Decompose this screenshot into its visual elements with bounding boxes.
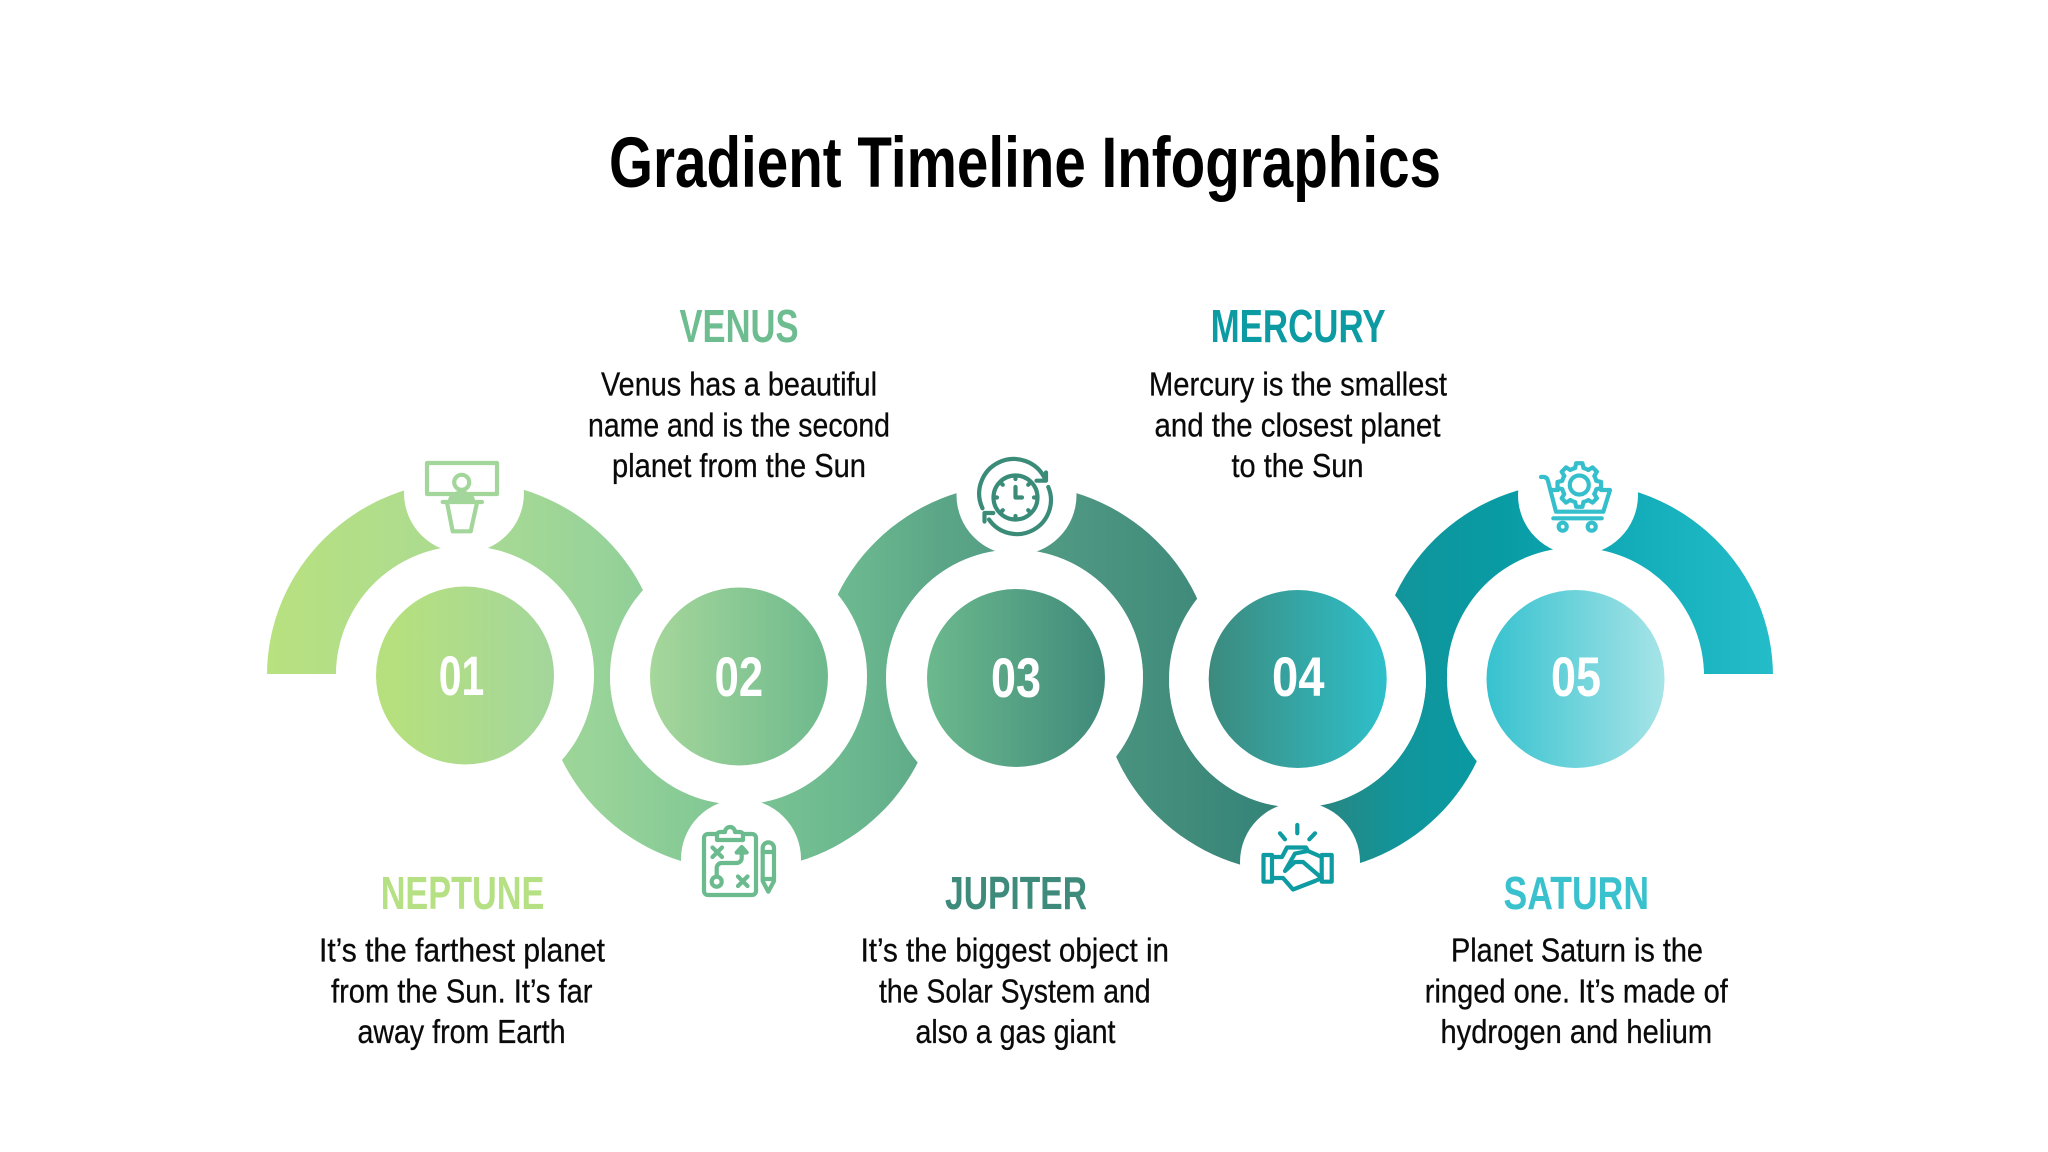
number circle 01: 01 <box>439 644 484 707</box>
number circle 02: 02 <box>715 645 763 708</box>
description: Venus: name and is the second <box>588 406 890 444</box>
heading: Mercury: MERCURY <box>1211 300 1386 352</box>
icon: clock with sync arrows <box>979 459 1051 534</box>
description: Mercury: Mercury is the smallest <box>1149 366 1447 402</box>
icon: handshake <box>1264 825 1332 890</box>
description: Neptune <box>319 932 605 1050</box>
number circle 04: 04 <box>1272 645 1324 708</box>
description: Venus <box>588 366 890 484</box>
panel: Jupiter <box>861 459 1169 1050</box>
description: Saturn <box>1425 932 1729 1050</box>
description: Neptune: It’s the farthest planet <box>319 932 605 968</box>
title: Gradient Timeline Infographics <box>609 124 1441 203</box>
description: Jupiter: It’s the biggest object in <box>861 932 1169 968</box>
wave ribbon <box>255 433 1785 922</box>
description: Jupiter: the Solar System and <box>879 972 1151 1010</box>
panel: Venus <box>588 300 890 895</box>
description: Jupiter: also a gas giant <box>916 1013 1116 1050</box>
description: Neptune: from the Sun. It’s far <box>331 972 592 1010</box>
description: Saturn: hydrogen and helium <box>1440 1013 1712 1050</box>
description: Mercury: and the closest planet <box>1154 406 1440 444</box>
heading: Jupiter: JUPITER <box>945 867 1087 919</box>
number circle 01 <box>376 586 554 764</box>
number circle 05: 05 <box>1551 645 1601 708</box>
description: Jupiter <box>861 932 1169 1050</box>
heading: Saturn: SATURN <box>1504 867 1649 919</box>
icon: shopping cart with gear <box>1541 463 1610 531</box>
number circle 05 <box>1486 590 1664 768</box>
heading: Venus: VENUS <box>680 300 798 352</box>
description: Venus: planet from the Sun <box>612 447 866 484</box>
number circle 03: 03 <box>991 646 1041 709</box>
number circle 03 <box>927 589 1105 767</box>
icon: speaker at podium <box>427 463 497 531</box>
description: Neptune: away from Earth <box>358 1013 566 1050</box>
description: Mercury <box>1149 366 1447 484</box>
heading: Neptune: NEPTUNE <box>381 867 544 919</box>
description: Venus: Venus has a beautiful <box>601 366 877 402</box>
panel: Saturn <box>1425 463 1729 1050</box>
description: Saturn: ringed one. It’s made of <box>1425 972 1729 1010</box>
number circle 02 <box>650 588 828 766</box>
panel: Mercury <box>1149 300 1447 890</box>
number circle 04 <box>1209 590 1387 768</box>
panel: Neptune <box>319 463 605 1050</box>
icon: clipboard plan and pencil <box>704 827 774 895</box>
description: Saturn: Planet Saturn is the <box>1451 932 1703 968</box>
description: Mercury: to the Sun <box>1232 447 1364 484</box>
